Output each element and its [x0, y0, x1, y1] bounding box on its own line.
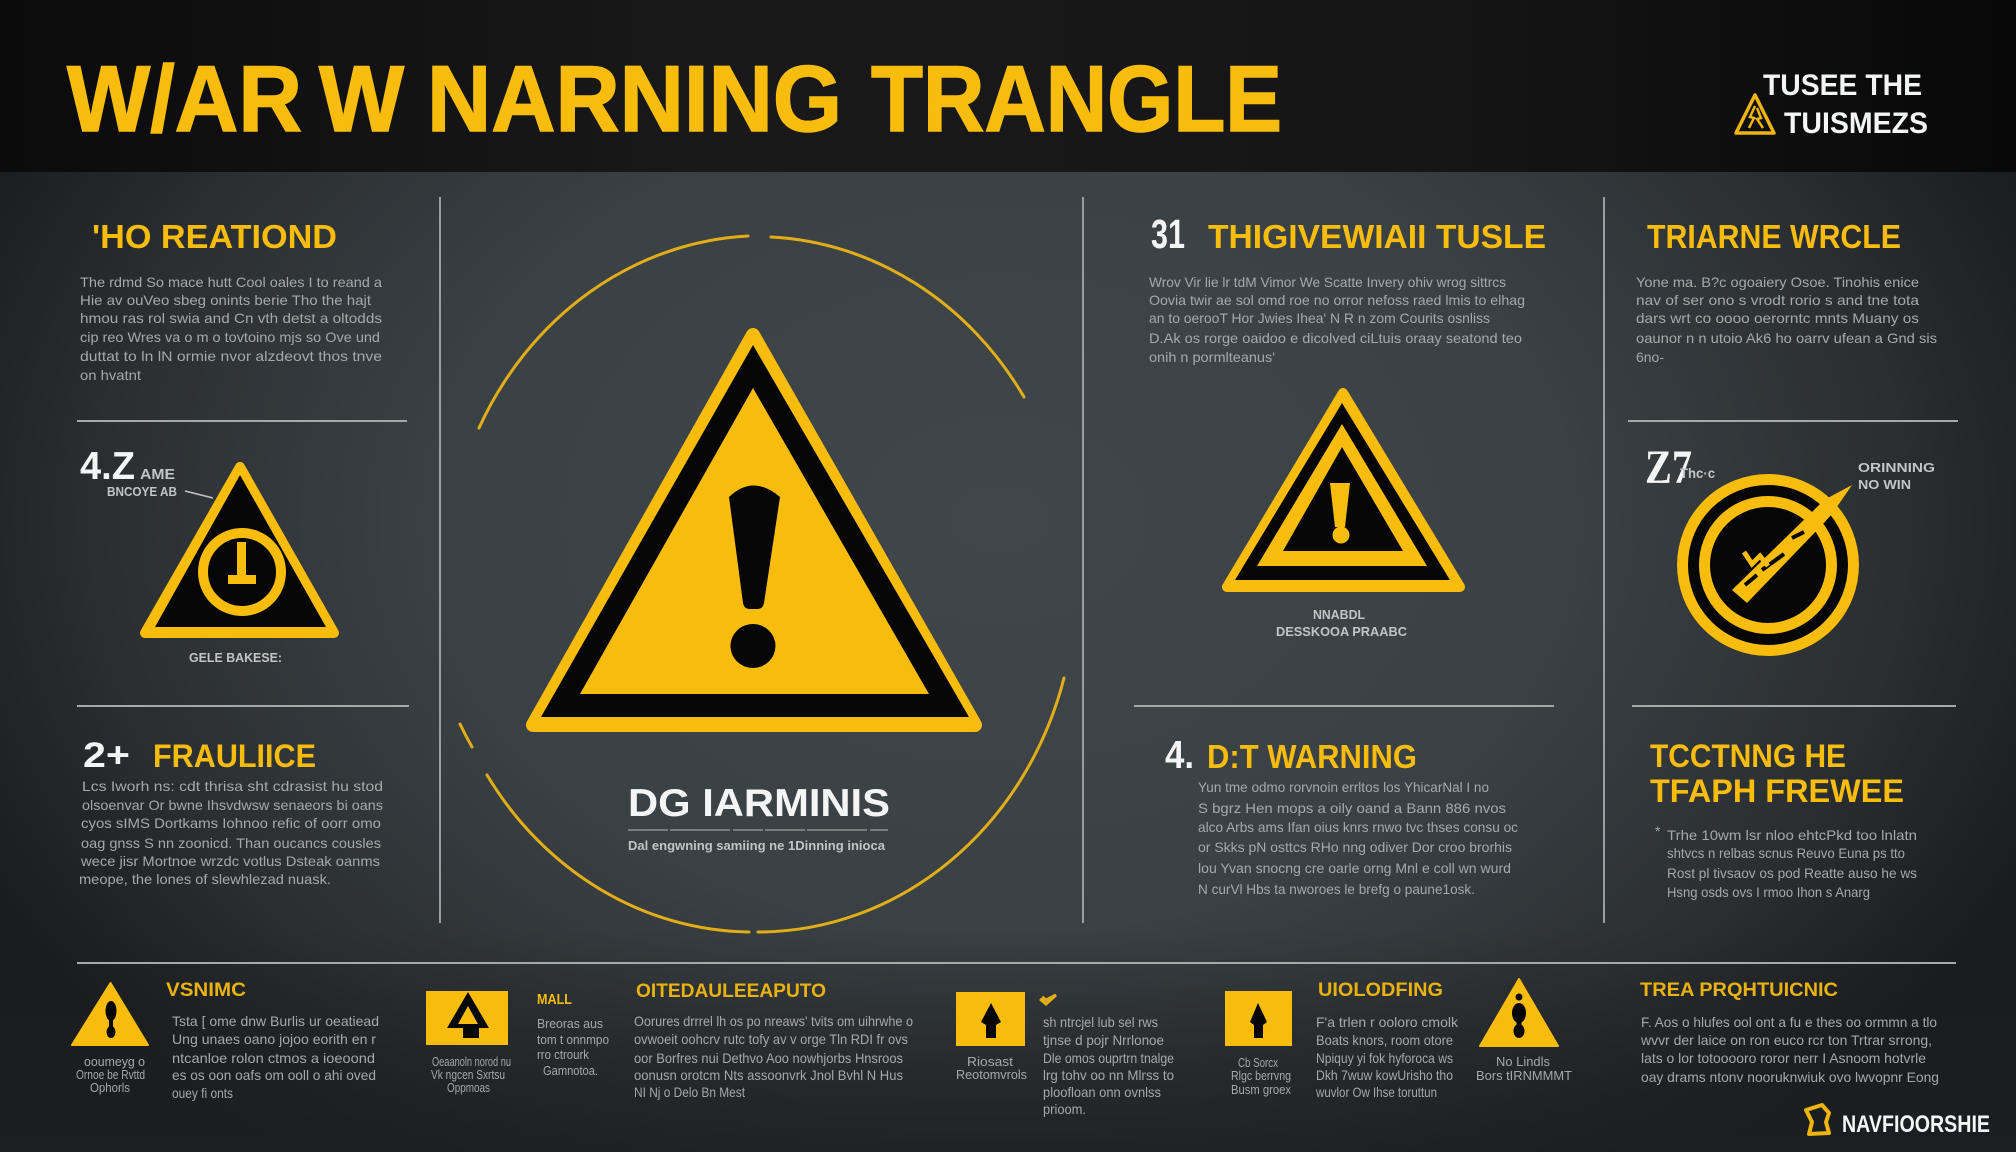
- text block: [172, 1013, 379, 1101]
- icon: check mark: [1040, 995, 1056, 1004]
- heading: TFAPH FREWEE: [1650, 773, 1904, 809]
- text block: [1640, 1014, 1939, 1085]
- caption: Cb Sorcx: [1238, 1055, 1278, 1070]
- figure label: AME: [140, 466, 175, 483]
- text block: wece jisr Mortnoe wrzdc votlus Dsteak oanms: [80, 853, 380, 869]
- title: TRANGLE: [871, 46, 1282, 151]
- text block: NI Nj o Delo Bn Mest: [634, 1084, 745, 1100]
- footer item: arrow sign: [956, 992, 1174, 1117]
- central caption: Dal engwning samiing ne 1Dinning inioca: [628, 838, 886, 853]
- header badge: TUSEE THE: [1763, 69, 1922, 102]
- icon: yellow square with arrow: [1225, 991, 1292, 1046]
- text block: Rost pl tivsaov os pod Reatte auso he ws: [1667, 865, 1917, 881]
- text block: wuvlor Ow Ihse toruttun: [1315, 1084, 1437, 1100]
- figure label: [80, 445, 177, 499]
- text block: Ung unaes oano jojoo eorith en r: [172, 1031, 376, 1047]
- text block: lou Yvan snocng cre oarle orng Mnl e coll wn wurd: [1198, 860, 1511, 876]
- text block: S bgrz Hen mops a oily oand a Bann 886 nvos: [1198, 800, 1506, 816]
- icon: circle with tool: [1677, 474, 1859, 656]
- caption: Rlgc berrvng: [1231, 1068, 1291, 1083]
- caption: Bors tIRNMMMT: [1476, 1068, 1572, 1083]
- caption: [1476, 1054, 1572, 1083]
- header band: [0, 0, 2016, 172]
- text block: [1043, 1014, 1174, 1117]
- footer item: triangle no lindls: [1476, 979, 1572, 1083]
- footer item: vsnimc: [72, 980, 379, 1101]
- title: NARNING: [427, 46, 842, 151]
- header badge: [1736, 69, 1928, 140]
- heading: 'HO REATIOND: [92, 218, 337, 255]
- callout: ORINNING: [1858, 460, 1935, 475]
- caption: Ornoe be Rvttd: [76, 1067, 145, 1082]
- text block: cip reo Wres va o m o tovtoino mjs so Ove und: [80, 329, 380, 345]
- text block: Wrov Vir lie lr tdM Vimor We Scatte Invery ohiv wrog sittrcs: [1149, 274, 1506, 290]
- text block: *: [1655, 823, 1661, 839]
- figure label: Thc·c: [1680, 465, 1715, 481]
- text block: [1149, 274, 1525, 365]
- panel: triangle with circle: [80, 445, 334, 665]
- text block: Yone ma. B?c ogoaiery Osoe. Tinohis enice: [1636, 274, 1919, 290]
- text block: [1198, 779, 1518, 897]
- number: 31: [1151, 211, 1185, 257]
- text block: Boats knors, room otore: [1316, 1032, 1453, 1048]
- text block: lrg tohv oo nn Mlrss to: [1043, 1067, 1174, 1083]
- panel: no-symbol circle: [1645, 441, 1935, 656]
- text block: Trhe 10wm lsr nloo ehtcPkd too lnlatn: [1667, 827, 1917, 843]
- heading: TRIARNE WRCLE: [1647, 218, 1901, 255]
- text block: oor Borfres nui Dethvo Aoo nowhjorbs Hnsroos: [634, 1050, 903, 1066]
- figure label: BNCOYE AB: [107, 484, 177, 499]
- callout: [1858, 460, 1935, 492]
- text block: rro ctrourk: [537, 1047, 589, 1062]
- text block: [1655, 823, 1917, 900]
- text block: Yun tme odmo rorvnoin errltos los YhicarNal I no: [1198, 779, 1489, 795]
- icon: yellow square sign: [426, 991, 508, 1045]
- text block: lats o lor totooooro roror nerr I Asnoom hotvrle: [1641, 1050, 1926, 1066]
- text block: shtvcs n relbas scnus Reuvo Euna ps tto: [1667, 845, 1905, 861]
- panel: tcctnng he: [1650, 738, 1917, 900]
- title: [67, 46, 1282, 151]
- caption: [1276, 607, 1408, 639]
- text block: Hsng osds ovs I rmoo Ihon s Anarg: [1667, 884, 1870, 900]
- text block: Dle omos ouprtrn tnalge: [1043, 1050, 1174, 1066]
- ring of arcs: [460, 236, 1064, 932]
- text block: ouey fi onts: [172, 1085, 233, 1101]
- caption: Oeaanoln norod nu: [432, 1054, 511, 1069]
- heading: OITEDAULEEAPUTO: [636, 981, 826, 1002]
- text block: [80, 274, 382, 383]
- text block: The rdmd So mace hutt Cool oales I to reand a: [80, 274, 382, 290]
- icon: double triangle: [1227, 393, 1460, 587]
- icon: yellow square with arrow: [956, 992, 1025, 1046]
- icon: logo mark: [1806, 1105, 1829, 1134]
- text block: alco Arbs ams Ifan oius knrs rnwo tvc thses consu oc: [1198, 819, 1518, 835]
- text block: ntcanloe rolon ctmos a ioeoond: [172, 1050, 375, 1066]
- panel: dt warning: [1165, 734, 1518, 897]
- text block: es os oon oafs om ooll o ahi oved: [172, 1067, 376, 1083]
- central caption: [628, 782, 890, 853]
- caption: NNABDL: [1313, 607, 1365, 622]
- caption: Vk ngcen Sxrtsu: [431, 1067, 505, 1082]
- leader line: [185, 491, 213, 498]
- text block: Gamnotoa.: [543, 1063, 598, 1078]
- callout: NO WIN: [1858, 477, 1911, 492]
- text block: [634, 1013, 913, 1100]
- text block: oaunor n n utoio Ak6 ho oarrv ufean a Gnd sis: [1636, 330, 1937, 346]
- title: W: [319, 46, 404, 151]
- caption: [76, 1054, 145, 1095]
- figure label: Z7: [1645, 441, 1692, 494]
- caption: Reotomvrols: [956, 1067, 1027, 1082]
- icon: triangle with circle: [145, 467, 334, 633]
- text block: Npiquy yi fok hyforoca ws: [1316, 1050, 1453, 1066]
- text block: [537, 1016, 609, 1078]
- text block: [79, 778, 383, 887]
- caption: [1231, 1055, 1291, 1097]
- text block: hmou ras rol swia and Cn vth detst a oltodds: [80, 310, 382, 326]
- text block: Oorures drrrel lh os po nreaws' tvits om uihrwhe o: [634, 1013, 913, 1029]
- caption: [431, 1054, 511, 1095]
- caption: Riosast: [967, 1054, 1013, 1069]
- heading: [1650, 738, 1904, 809]
- text block: dars wrt co oooo oerorntc mnts Muany os: [1636, 310, 1919, 326]
- footer item: trea prqhtuicnic: [1640, 980, 1939, 1085]
- text block: ovwoeit oohcrv rutc tofy av v orge Tln RDI fr ovs: [634, 1031, 908, 1047]
- heading: D:T WARNING: [1207, 738, 1417, 775]
- text block: tom t onnmpo: [537, 1032, 609, 1047]
- caption: Busm groex: [1231, 1082, 1291, 1097]
- text block: 6no-: [1636, 349, 1664, 365]
- text block: Lcs Iworh ns: cdt thrisa sht cdrasist hu stod: [82, 778, 383, 794]
- caption: ooumeyg o: [84, 1054, 145, 1069]
- icon: yellow triangle: [72, 983, 148, 1045]
- text block: F'a trlen r ooloro cmolk: [1316, 1014, 1459, 1030]
- text block: Tsta [ ome dnw Burlis ur oeatiead: [172, 1013, 379, 1029]
- heading: THIGIVEWIAII TUSLE: [1208, 218, 1546, 255]
- footer item: oitedaul eeaputo: [634, 981, 913, 1100]
- icon: large warning triangle: [533, 335, 975, 725]
- caption: Ophorls: [90, 1080, 130, 1095]
- icon: small warning triangle: [1736, 95, 1774, 133]
- heading: VSNIMC: [166, 980, 246, 1001]
- text block: Hie av ouVeo sbeg onints berie Tho the hajt: [80, 292, 371, 308]
- icon: yellow triangle: [1480, 979, 1558, 1046]
- text block: F. Aos o hlufes ool ont a fu e thes oo ormmn a tlo: [1641, 1014, 1937, 1030]
- text block: ploofloan onn ovnlss: [1043, 1084, 1161, 1100]
- text block: an to oerooT Hor Jwies Ihea' N R n zom Courits osnliss: [1149, 310, 1490, 326]
- text block: meope, the lones of slewhlezad nuask.: [79, 871, 331, 887]
- text block: D.Ak os rorge oaidoo e dicolved ciLtuis oraay seatond teo: [1149, 330, 1522, 346]
- text block: sh ntrcjel lub sel rws: [1043, 1014, 1158, 1030]
- text block: Breoras aus: [537, 1016, 603, 1031]
- heading: MALL: [537, 991, 572, 1008]
- caption: No Lindls: [1496, 1054, 1550, 1069]
- text block: oonusn orotcm Nts assoonvrk Jnol Bvhl N Hus: [634, 1067, 903, 1083]
- text block: oay drams ntonv nooruknwiuk ovo lwvopnr Eong: [1641, 1069, 1939, 1085]
- figure label: 4.Z: [80, 445, 135, 488]
- heading: FRAULIICE: [153, 738, 316, 774]
- heading: TCCTNNG HE: [1650, 738, 1846, 774]
- text block: wvvr der laice on ron euco rcr ton Trtrar srrong,: [1640, 1032, 1932, 1048]
- text block: N curVl Hbs ta nworoes le brefg o paune1osk.: [1198, 881, 1475, 897]
- text block: duttat to ln lN ormie nvor alzdeovt thos tnve: [80, 348, 382, 364]
- text block: Dkh 7wuw kowUrisho tho: [1316, 1067, 1453, 1083]
- number: 2+: [83, 736, 130, 775]
- title: W/AR: [67, 46, 302, 151]
- text block: oag gnss S nn zoonicd. Than oucancs cousles: [81, 835, 381, 851]
- text block: [1636, 274, 1937, 365]
- text block: or Skks pN osttcs RHo nng odiver Dor croo brorhis: [1198, 839, 1512, 855]
- text block: olsoenvar Or bwne Ihsvdwsw senaeors bi oans: [82, 797, 383, 813]
- caption: Oppmoas: [447, 1080, 490, 1095]
- heading: TREA PRQHTUICNIC: [1640, 980, 1838, 1001]
- text block: [1315, 1014, 1459, 1100]
- text block: onih n pormlteanus': [1149, 349, 1275, 365]
- panel: triarne wrcle: [1636, 218, 1937, 365]
- panel: fraulice: [79, 736, 383, 887]
- caption: [956, 1054, 1027, 1082]
- panel: reationd: [80, 218, 382, 383]
- text block: tjnse d pojr Nrrlonoe: [1043, 1032, 1164, 1048]
- text block: prioom.: [1043, 1101, 1086, 1117]
- central caption: DG IARMINIS: [628, 782, 890, 825]
- text block: nav of ser ono s vrodt rorio s and tne tota: [1636, 292, 1919, 308]
- text block: Oovia twir ae sol omd roe no orror nefoss raed lmis to elhag: [1149, 292, 1525, 308]
- heading: UIOLODFING: [1318, 980, 1443, 1001]
- caption: DESSKOOA PRAABC: [1276, 624, 1408, 639]
- text block: on hvatnt: [80, 367, 141, 383]
- caption: GELE BAKESE:: [189, 650, 282, 665]
- text block: cyos sIMS Dortkams Iohnoo refic of oorr omo: [81, 815, 381, 831]
- number: 4.: [1165, 734, 1194, 777]
- panel: concentric warning triangle: [1227, 393, 1460, 639]
- logo: [1806, 1105, 1990, 1138]
- footer item: mall: [426, 991, 609, 1095]
- panel: central warning triangle: [460, 236, 1064, 932]
- footer item: uiolodfing: [1225, 980, 1459, 1100]
- panel: thigivewiaii tusle: [1149, 211, 1546, 365]
- header badge: TUISMEZS: [1784, 107, 1928, 140]
